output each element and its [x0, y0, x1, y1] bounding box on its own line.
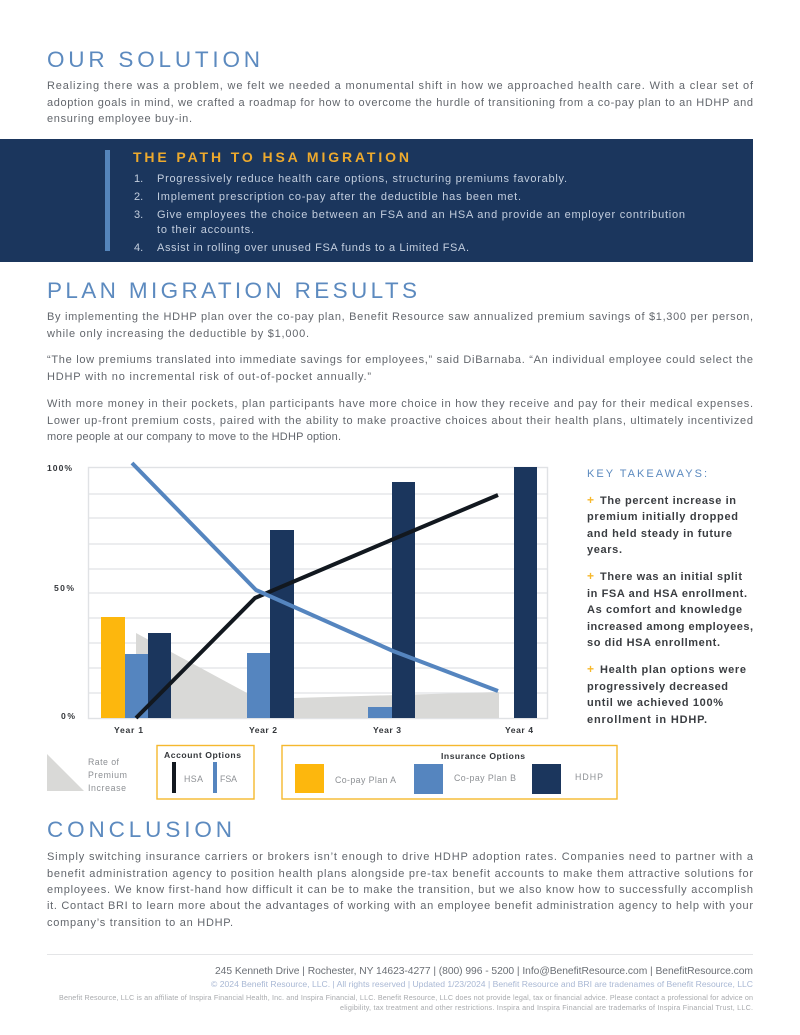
legend: account options: FSA	[220, 774, 237, 784]
text block: solution intro	[47, 80, 754, 125]
takeaway 2: increased among employees,	[587, 621, 753, 633]
text block: solution intro: Realizing there was a problem, we felt we needed a monumental shift in how we approached health care. With a clear set of	[47, 80, 754, 92]
footer: contact line: 245 Kenneth Drive | Rochester, NY 14623-4277 | (800) 996 - 5200 | Info@BenefitResource.com | BenefitResource.com	[215, 966, 753, 977]
text block: plan migration results: while only increasing the deductible by $1,000.	[46, 328, 309, 340]
y axis labels: 100%	[47, 463, 72, 473]
legend: rate of premium increase: Rate of	[88, 757, 120, 767]
line: FSA	[132, 463, 498, 691]
text block: plan migration results: more people at our company to move to the HDHP option.	[47, 431, 341, 443]
takeaway 2: so did HSA enrollment.	[587, 637, 720, 649]
takeaway 2: There was an initial split	[600, 571, 742, 583]
takeaway 3	[587, 662, 746, 726]
legend: rate of premium increase: Increase	[88, 783, 126, 793]
text block: plan migration results: Lower up-front premium costs, paired with the ability to make proactive choices about their health plans, ultimately incentivized	[47, 415, 753, 427]
x axis labels: Year 1	[114, 725, 143, 735]
bars: year 1	[101, 617, 171, 718]
takeaway 3: until we achieved 100%	[587, 697, 723, 709]
takeaway 1: and held steady in future	[587, 528, 732, 540]
takeaway 2: As comfort and knowledge	[587, 604, 742, 616]
legend: rate of premium increase	[47, 754, 127, 793]
x axis labels: Year 4	[505, 725, 533, 735]
takeaway 2	[587, 569, 753, 649]
text block: plan migration results: By implementing the HDHP plan over the co-pay plan, Benefit Resource saw annualized premium savings of $1,300 per person,	[47, 311, 753, 323]
bars: year 3	[368, 482, 415, 718]
text block: conclusion: company’s transition to an HDHP.	[47, 917, 233, 929]
line: HSA	[136, 495, 498, 718]
takeaway 1: years.	[587, 544, 622, 556]
numbered list: 1.	[134, 173, 143, 185]
y axis labels: 0%	[61, 711, 75, 721]
takeaway 1: +	[587, 493, 594, 507]
legend: insurance options: Co-pay Plan A	[335, 775, 396, 785]
x axis labels	[114, 725, 533, 735]
text block: plan migration results: HDHP with no incremental risk of out-of-pocket annually.”	[47, 371, 371, 383]
text block: conclusion: Simply switching insurance carriers or brokers isn’t enough to drive HDHP adoption rates. Companies need to partner with a	[47, 851, 754, 863]
legend: account options: Account Options	[164, 750, 241, 760]
text block: solution intro: ensuring employee buy-in.	[47, 113, 192, 125]
y axis labels	[47, 463, 75, 721]
takeaway 1	[587, 493, 738, 556]
legend: rate of premium increase: Premium	[88, 770, 127, 780]
text block: plan migration results: With more money in their pockets, plan participants have more choice in how they receive and pay for their medical expenses.	[47, 398, 753, 410]
key takeaways heading: KEY TAKEAWAYS:	[587, 468, 707, 480]
panel: the path to HSA migration	[0, 139, 753, 262]
legend: insurance options	[282, 746, 617, 799]
legend: insurance options: HDHP	[575, 772, 603, 782]
legend: account options: HSA	[184, 774, 203, 784]
text block: solution intro: adoption goals in mind, we crafted a roadmap for how to overcome the hurdle of transitioning from a co-pay plan to an HDHP and	[47, 97, 753, 109]
numbered list	[134, 173, 685, 254]
bars: year 4	[514, 467, 537, 718]
footer: disclaimer: Benefit Resource, LLC is an affiliate of Inspira Financial Health, Inc. and Inspira Financial, LLC. Benefit Resource, LLC does not provide legal, tax or financial advice. Please contact a professional for advice on	[59, 993, 753, 1002]
x axis labels: Year 2	[249, 725, 277, 735]
numbered list: to their accounts.	[157, 224, 254, 236]
legend: account options	[157, 746, 254, 799]
area: rate of premium increase	[136, 633, 499, 718]
numbered list: Give employees the choice between an FSA and an HSA and provide an employer contribution	[157, 209, 685, 221]
footer: disclaimer: eligibility, tax treatment and other restrictions. Inspira and Inspira Financial are trademarks of Inspira Financial Trust, LLC.	[340, 1003, 753, 1012]
takeaway 3: +	[587, 662, 594, 676]
takeaway 3: progressively decreased	[587, 681, 728, 693]
numbered list: 4.	[134, 242, 143, 254]
numbered list: 2.	[134, 191, 143, 203]
legend: insurance options: Co-pay Plan B	[454, 773, 516, 783]
numbered list: Assist in rolling over unused FSA funds to a Limited FSA.	[157, 242, 469, 254]
y axis labels: 50%	[54, 583, 74, 593]
takeaway 1: The percent increase in	[600, 495, 736, 507]
heading: conclusion: CONCLUSION	[47, 817, 232, 842]
bars: year 2	[247, 530, 294, 718]
text block: plan migration results: “The low premiums translated into immediate savings for employees,” said DiBarnaba. “An individual employee could select the	[47, 354, 753, 366]
takeaway 1: premium initially dropped	[587, 511, 738, 523]
text block: conclusion: it. Contact BRI to learn more about the advantages of working with an employee benefit administration agency to help with your	[47, 900, 753, 912]
numbered list: Implement prescription co-pay after the deductible has been met.	[157, 191, 521, 203]
footer: disclaimer	[59, 993, 753, 1012]
x axis labels: Year 3	[373, 725, 401, 735]
text block: conclusion: employees. We know first-hand how difficult it can be to make the transition, but we also know how to successfully accomplish	[47, 884, 753, 896]
text block: conclusion	[47, 851, 754, 929]
takeaway 3: Health plan options were	[600, 664, 746, 676]
takeaway 3: enrollment in HDHP.	[587, 714, 707, 726]
text block: conclusion: benefit administration agency to position health plans alongside pre-tax benefit accounts to make them attractive solutions for	[47, 868, 753, 880]
footer: copyright line: © 2024 Benefit Resource, LLC. | All rights reserved | Updated 1/23/2024 | Benefit Resource and BRI are tradenames of Benefit Resource, LLC	[211, 979, 753, 989]
numbered list: 3.	[134, 209, 143, 221]
text block: key takeaways	[587, 468, 753, 726]
legend: insurance options: Insurance Options	[441, 751, 525, 761]
takeaway 2: in FSA and HSA enrollment.	[587, 588, 747, 600]
text block: plan migration results	[46, 311, 753, 443]
heading: our solution: OUR SOLUTION	[47, 47, 260, 72]
heading: plan migration results: PLAN MIGRATION RESULTS	[47, 278, 417, 303]
panel heading: THE PATH TO HSA MIGRATION	[133, 149, 409, 165]
numbered list: Progressively reduce health care options, structuring premiums favorably.	[157, 173, 567, 185]
bar and line chart	[47, 463, 548, 735]
takeaway 2: +	[587, 569, 594, 583]
